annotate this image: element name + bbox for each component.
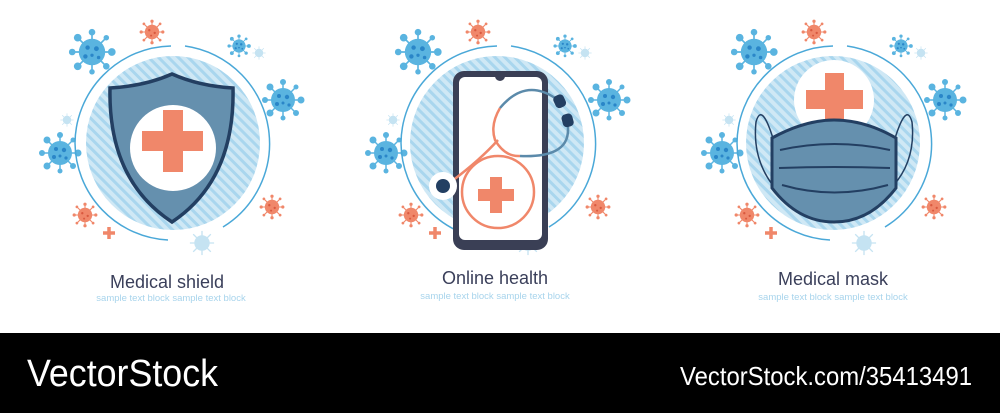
panel: online health <box>365 20 630 302</box>
panel: medical shield <box>39 20 304 304</box>
icon: mask <box>755 60 913 222</box>
footer logo text: VectorStock <box>27 353 219 395</box>
panel: medical mask <box>701 20 966 303</box>
heading: Medical shield: Medical shield <box>110 272 224 292</box>
text block: sample text block sample text block <box>758 292 908 303</box>
heading: Medical mask: Medical mask <box>778 269 889 289</box>
text block: sample text block sample text block <box>96 293 246 304</box>
hatched circle <box>746 56 920 230</box>
text block: sample text block sample text block <box>420 291 570 302</box>
footer id text: VectorStock.com/35413491 <box>680 361 972 391</box>
footer bar <box>0 333 1000 413</box>
icon: phone with stethoscope <box>429 71 575 250</box>
icon: shield <box>110 74 233 222</box>
hatched circle <box>86 56 260 230</box>
hatched circle <box>410 56 584 230</box>
heading: Online health: Online health <box>442 268 548 288</box>
